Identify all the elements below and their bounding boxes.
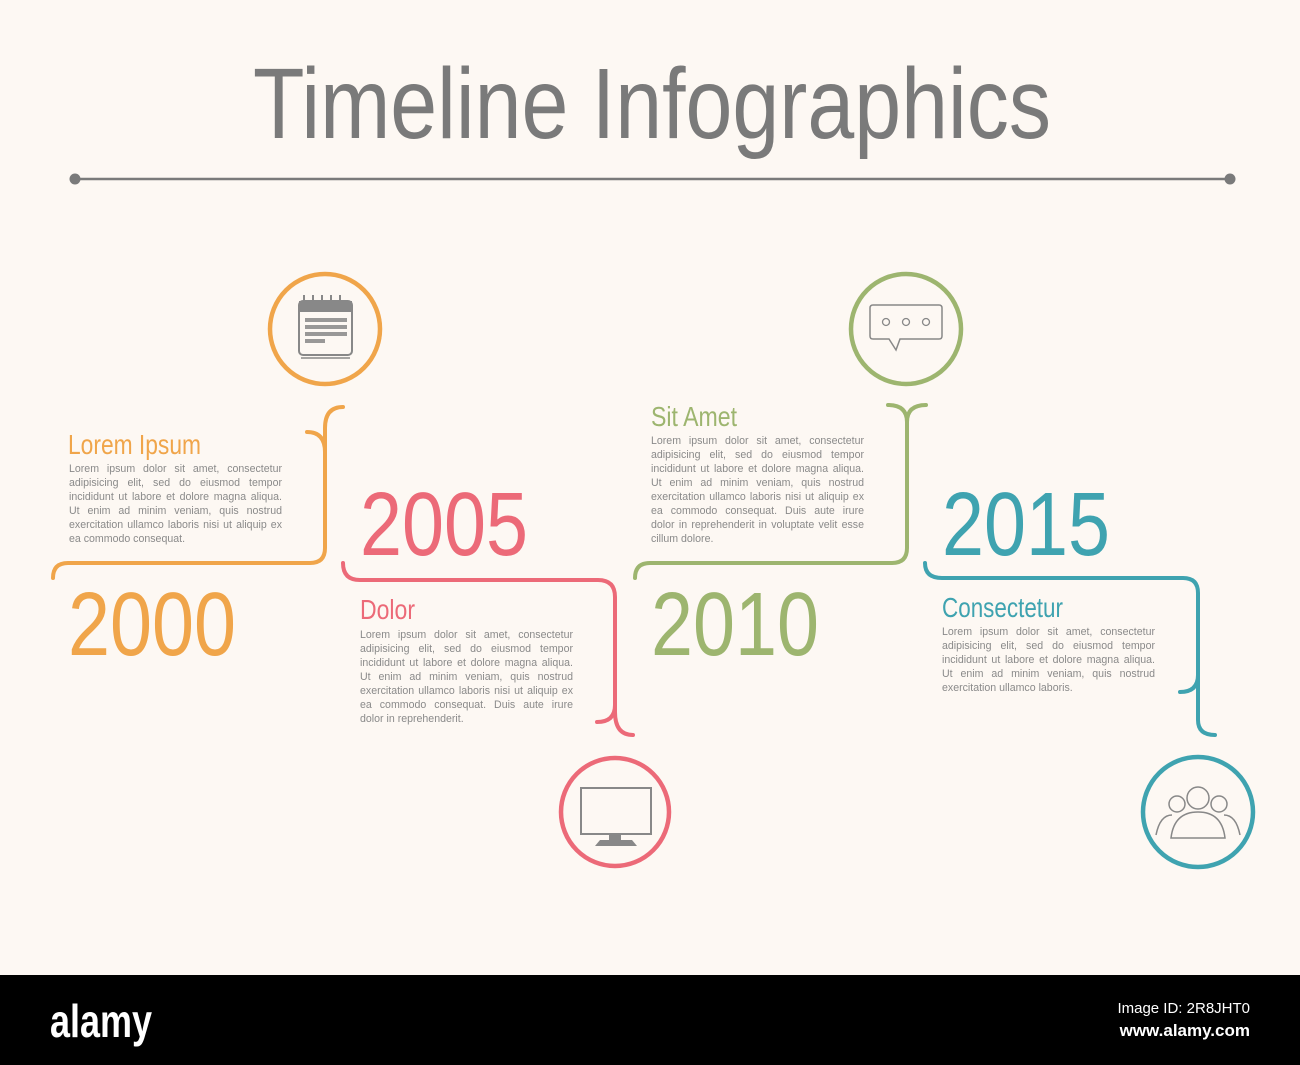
text: Lorem Ipsum body: Lorem ipsum dolor sit amet, consectetur: [69, 463, 282, 475]
text: Consectetur body: Lorem ipsum dolor sit amet, consectetur: [942, 626, 1155, 638]
icon circle: monitor: [561, 758, 669, 866]
text: Lorem Ipsum body: adipisicing elit, sed do eiusmod tempor: [69, 477, 282, 489]
text: Sit Amet body: Ut enim ad minim veniam, quis nostrud: [651, 477, 864, 489]
icon circle: calendar: [270, 274, 380, 384]
footer: www.alamy.com: [1119, 1021, 1250, 1040]
text: Dolor body: dolor in reprehenderit.: [360, 713, 464, 725]
footer: [0, 975, 1300, 1065]
years: 2005: [360, 475, 528, 575]
title rule: [70, 174, 1236, 184]
icon circle: chat: [851, 274, 961, 384]
text: Consectetur body: exercitation ullamco laboris.: [942, 682, 1073, 694]
text: Dolor body: Ut enim ad minim veniam, quis nostrud: [360, 671, 573, 683]
headings: [68, 401, 1063, 625]
text: Dolor body: [360, 629, 573, 725]
text: Consectetur body: [942, 626, 1155, 694]
years: [68, 475, 1110, 675]
years: 2010: [651, 575, 819, 675]
years: 2015: [942, 475, 1110, 575]
text: Dolor body: ea commodo consequat. Duis aute irure: [360, 699, 573, 711]
headings: Sit Amet: [651, 401, 737, 432]
footer: Image ID: 2R8JHT0: [1117, 1000, 1250, 1017]
headings: Dolor: [360, 594, 415, 625]
text: Lorem Ipsum body: exercitation ullamco laboris nisi ut aliquip ex: [69, 519, 282, 531]
text: Lorem Ipsum body: [69, 463, 282, 545]
text: Consectetur body: incididunt ut labore et dolore magna aliqua.: [942, 654, 1155, 666]
text: Sit Amet body: adipisicing elit, sed do eiusmod tempor: [651, 449, 864, 461]
text: Lorem Ipsum body: Ut enim ad minim veniam, quis nostrud: [69, 505, 282, 517]
text: Sit Amet body: Lorem ipsum dolor sit amet, consectetur: [651, 435, 864, 447]
connector: blue: [925, 563, 1215, 735]
title: Timeline Infographics: [253, 48, 1051, 160]
headings: Consectetur: [942, 592, 1063, 623]
text: Dolor body: exercitation ullamco laboris nisi ut aliquip ex: [360, 685, 573, 697]
text: Consectetur body: adipisicing elit, sed do eiusmod tempor: [942, 640, 1155, 652]
connector: red: [343, 563, 633, 735]
text: Dolor body: adipisicing elit, sed do eiusmod tempor: [360, 643, 573, 655]
text: Sit Amet body: ea commodo consequat. Duis aute irure: [651, 505, 864, 517]
text: Sit Amet body: exercitation ullamco laboris nisi ut aliquip ex: [651, 491, 864, 503]
footer: alamy: [50, 995, 152, 1047]
text: Sit Amet body: dolor in reprehenderit in voluptate velit esse: [651, 519, 864, 531]
text: Lorem Ipsum body: incididunt ut labore et dolore magna aliqua.: [69, 491, 282, 503]
text: Lorem Ipsum body: ea commodo consequat.: [69, 533, 185, 545]
years: 2000: [68, 575, 236, 675]
text: Dolor body: incididunt ut labore et dolore magna aliqua.: [360, 657, 573, 669]
text: Sit Amet body: [651, 435, 864, 545]
icon circle: people: [1143, 757, 1253, 867]
headings: Lorem Ipsum: [68, 429, 201, 460]
text: Sit Amet body: incididunt ut labore et dolore magna aliqua.: [651, 463, 864, 475]
text: Consectetur body: Ut enim ad minim veniam, quis nostrud: [942, 668, 1155, 680]
text: Sit Amet body: cillum dolore.: [651, 533, 713, 545]
text: Dolor body: Lorem ipsum dolor sit amet, consectetur: [360, 629, 573, 641]
connector: green: [635, 405, 926, 578]
connector: orange: [53, 407, 343, 578]
